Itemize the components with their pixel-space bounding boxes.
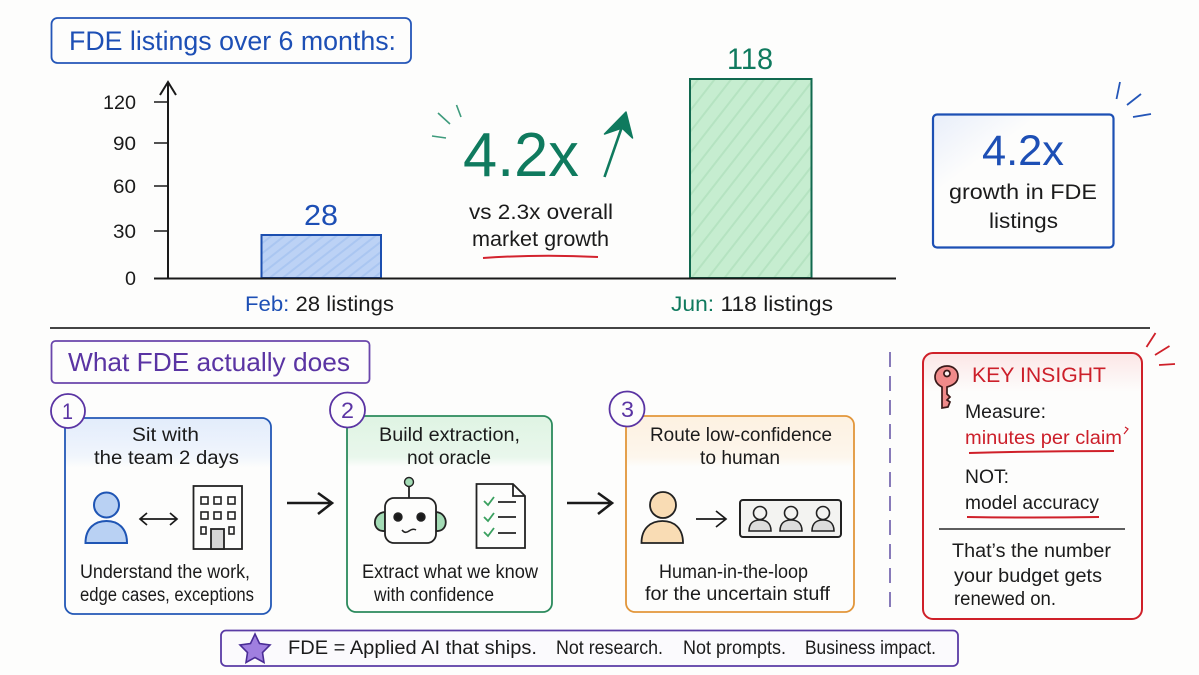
icon: arrow to review team [696, 511, 726, 527]
arrow: step 1 to step 2 [287, 493, 332, 514]
step 2 description [362, 562, 538, 606]
step 2 description: Extract what we know [362, 562, 538, 583]
icon: key [935, 366, 958, 408]
section divider [50, 327, 1150, 329]
step 1 description [80, 562, 254, 606]
step number 2 [330, 392, 365, 428]
y axis with ticks and labels [103, 82, 176, 290]
comparison text: vs 2.3x overall [469, 201, 613, 224]
callout card: 4.2x growth in FDE listings: 4.2x [982, 127, 1064, 175]
x axis baseline [154, 278, 896, 280]
bar: Jun [690, 43, 812, 278]
measure text: minutes per claim [965, 428, 1122, 449]
heading: FDE listings over 6 months [52, 18, 411, 63]
sparks [432, 105, 461, 138]
big number 4.2x: 4.2x [463, 121, 579, 190]
panel: key insight [923, 333, 1175, 619]
panel: step 2 [330, 392, 552, 612]
icon: double arrow [140, 513, 177, 525]
step 1 title: Sit with [132, 425, 199, 446]
y axis with ticks and labels: 0 [125, 269, 136, 290]
step 1 description: Understand the work, [80, 562, 250, 583]
heading: FDE listings over 6 months: FDE listings over 6 months: [69, 26, 396, 56]
callout card: 4.2x growth in FDE listings: growth in FDE [949, 181, 1097, 204]
heading: What FDE actually does: What FDE actually does [68, 347, 350, 377]
label: Feb 28 listings: Feb: 28 listings [245, 293, 394, 316]
comparison text [469, 201, 613, 258]
step 2 title: not oracle [407, 448, 491, 469]
heading: What FDE actually does [52, 341, 370, 383]
arrow: step 2 to step 3 [567, 493, 612, 514]
budget text: your budget gets [954, 566, 1102, 587]
not text: model accuracy [965, 493, 1099, 514]
bar: Jun: 118 [727, 43, 773, 76]
banner text: Not prompts. [683, 638, 786, 659]
y axis with ticks and labels: 120 [103, 93, 136, 114]
step number 2: 2 [341, 398, 354, 423]
step 3 title: Route low-confidence [650, 425, 832, 446]
y axis with ticks and labels: 90 [113, 134, 136, 155]
arrow up [604, 112, 632, 177]
step number 1 [51, 394, 85, 428]
step number 3: 3 [621, 397, 634, 422]
callout card: 4.2x growth in FDE listings: listings [989, 210, 1058, 233]
banner text [288, 638, 936, 659]
key insight heading: KEY INSIGHT [972, 364, 1106, 387]
not text [965, 467, 1099, 518]
icon: office building [194, 486, 242, 549]
banner text: FDE = Applied AI that ships. [288, 638, 537, 659]
dashed vertical separator [889, 352, 891, 612]
step 3 description [645, 562, 831, 605]
sparks [1146, 333, 1175, 365]
footer banner [221, 630, 958, 666]
budget text [952, 541, 1112, 610]
callout card: 4.2x growth in FDE listings [933, 82, 1151, 248]
bar chart: FDE listings Feb vs Jun [103, 43, 896, 316]
step 1 description: edge cases, exceptions [80, 585, 254, 606]
step 3 title: to human [700, 448, 780, 469]
banner text: Not research. [556, 638, 663, 659]
icon: person orange [642, 492, 683, 543]
icon: review team box [740, 500, 841, 537]
not text: NOT: [965, 467, 1009, 488]
panel: step 3 [610, 392, 854, 612]
bar: Feb: 28 [304, 200, 338, 232]
step 2 title: Build extraction, [379, 425, 520, 446]
step 3 title [650, 425, 832, 469]
step number 3 [610, 392, 644, 426]
step 3 description: for the uncertain stuff [645, 584, 831, 605]
icon: star [240, 634, 270, 662]
step 2 title [379, 425, 520, 469]
y axis with ticks and labels: 60 [113, 177, 136, 198]
panel: step 1 [51, 394, 271, 614]
step 1 title: the team 2 days [94, 448, 239, 469]
measure text: Measure: [965, 402, 1046, 423]
icon: checklist document [476, 484, 525, 548]
y axis with ticks and labels: 30 [113, 222, 136, 243]
budget text: That’s the number [952, 541, 1112, 562]
label: Jun 118 listings: Jun: 118 listings [671, 293, 833, 316]
icon: person blue [86, 492, 127, 543]
inner divider [939, 528, 1125, 530]
icon: robot [375, 478, 446, 543]
step number 1: 1 [62, 399, 73, 424]
step 1 title [94, 425, 239, 469]
measure text [965, 402, 1128, 453]
bar: Feb [262, 200, 381, 278]
callout: 4.2x vs market growth [432, 105, 632, 258]
banner text: Business impact. [805, 638, 936, 659]
step 3 description: Human-in-the-loop [659, 562, 808, 583]
budget text: renewed on. [954, 589, 1056, 610]
step 2 description: with confidence [373, 585, 494, 606]
comparison text: market growth [472, 228, 609, 251]
